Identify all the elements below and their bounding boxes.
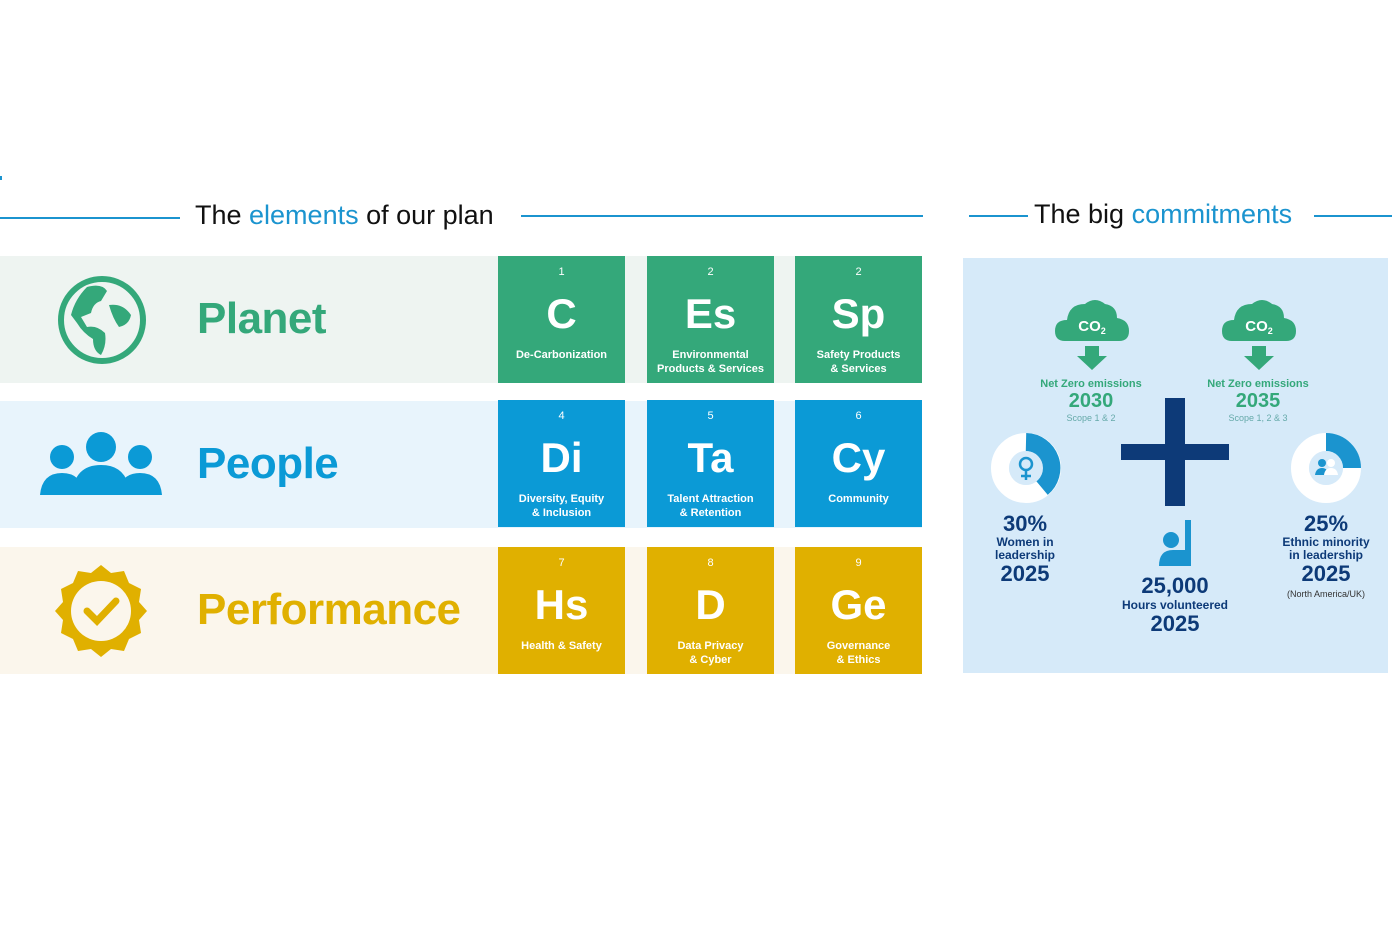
tile C: C [546,290,577,337]
icon: badge [55,565,147,657]
tile C: 1 [558,266,565,278]
text: net zero 2035: Net Zero emissions [1207,378,1309,390]
icon: co2 cloud 1 [1055,300,1129,370]
text: women: 2025 [1001,561,1049,586]
row: planet [0,256,922,383]
tile Sp: Sp [832,290,885,337]
tile Es: Products & Services [657,363,764,375]
tile Ge: Ge [830,581,887,628]
tile Hs: Hs [535,581,588,628]
text: net zero 2035: Scope 1, 2 & 3 [1228,413,1288,423]
text: women: 30% [1003,511,1047,536]
icon: co2 cloud 2: 2 [1268,326,1273,336]
title: elements: The elements of our plan [195,200,494,230]
icon: people [40,432,162,495]
icon: co2 cloud 2 [1222,300,1296,370]
text: ethnic: (North America/UK) [1287,589,1365,599]
heading line left [0,217,180,219]
icon: raised hand [1159,520,1191,566]
label: planet: Planet [197,294,326,343]
tile Es: Es [685,290,736,337]
tile D: Data Privacy [677,640,744,652]
text: net zero 2030: Scope 1 & 2 [1066,413,1116,423]
panel: commitments [963,258,1388,673]
row: people [0,401,922,528]
label: people: People [197,439,338,488]
text: women [995,511,1055,586]
tile Cy: Community [828,493,889,505]
tile Di: & Inclusion [532,507,591,519]
tile D [647,547,774,674]
donut: women [991,433,1061,503]
text: net zero 2030 [1040,378,1142,423]
tile D: D [695,581,726,628]
tile Es: Environmental [672,349,749,361]
tile Ta [647,400,774,527]
tile Ta: Talent Attraction [667,493,754,505]
text: ethnic: in leadership [1289,548,1363,562]
tile Hs: 7 [558,557,565,569]
marker [0,176,2,180]
tile Di: Diversity, Equity [519,493,604,505]
text: ethnic: 25% [1304,511,1348,536]
tile Ta: 5 [707,410,714,422]
text: volunteering: 2025 [1151,611,1199,636]
tile Ta: Ta [688,434,733,481]
text: net zero 2030: Net Zero emissions [1040,378,1142,390]
text: net zero 2035: 2035 [1236,390,1280,412]
tile Sp: 2 [855,266,862,278]
tile Di: Di [540,434,582,481]
tile D: 8 [707,557,714,569]
tile Ge [795,547,922,674]
tile Ge: & Ethics [836,654,880,666]
tile Es: 2 [707,266,714,278]
tile Ge: Governance [827,640,890,652]
tile C: De-Carbonization [516,349,607,361]
icon: globe [58,276,146,364]
text: ethnic [1282,511,1370,599]
icon: co2 cloud 1: CO [1078,318,1101,335]
text: net zero 2030: 2030 [1069,390,1113,412]
text: volunteering: Hours volunteered [1122,598,1228,612]
tile Hs [498,547,625,674]
row: performance [0,547,922,674]
text: women: leadership [995,548,1055,562]
plus sign [1121,398,1229,506]
tile Di: 4 [558,410,565,422]
tile Es [647,256,774,383]
tile C [498,256,625,383]
text: ethnic: 2025 [1302,561,1350,586]
tile Cy [795,400,922,527]
title: commitments: The big commitments [1034,199,1292,229]
text: volunteering [1122,573,1228,636]
label: performance: Performance [197,585,461,634]
tile Cy: 6 [855,410,862,422]
tile Ta: & Retention [680,507,741,519]
tile Cy: Cy [832,434,885,481]
donut: ethnic [1291,433,1361,503]
icon: co2 cloud 1: 2 [1101,326,1106,336]
text: women: Women in [996,535,1054,549]
tile Sp: Safety Products [817,349,900,361]
text: net zero 2035 [1207,378,1309,423]
tile D: & Cyber [689,654,732,666]
tile Di [498,400,625,527]
tile Sp [795,256,922,383]
text: ethnic: Ethnic minority [1282,535,1370,549]
tile Ge: 9 [855,557,862,569]
tile Sp: & Services [830,363,887,375]
icon: co2 cloud 2: CO [1245,318,1268,335]
text: volunteering: 25,000 [1141,573,1209,598]
tile Hs: Health & Safety [521,640,602,652]
